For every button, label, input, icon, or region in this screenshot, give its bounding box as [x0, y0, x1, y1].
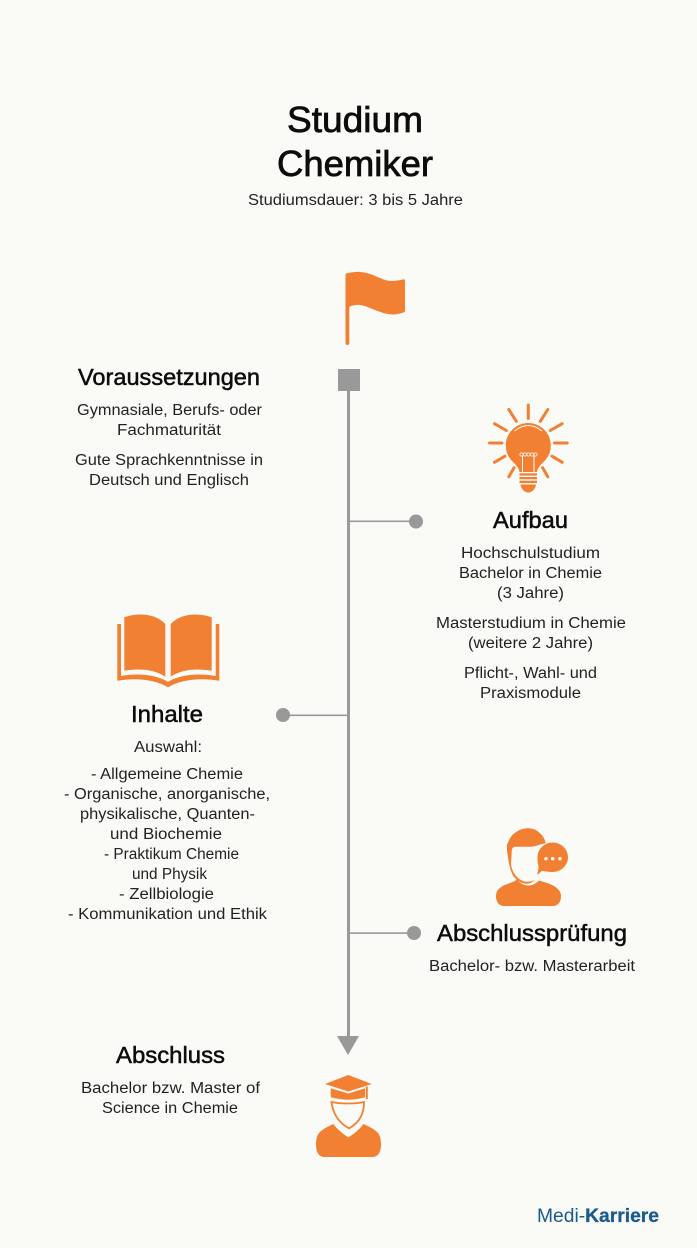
heading: Voraussetzungen: Voraussetzungen [78, 364, 260, 390]
title: Studium [287, 99, 423, 140]
panel: Abschluss [81, 1042, 261, 1117]
text: Inhalte list: und Biochemie [110, 826, 222, 843]
text: Aufbau details: Pflicht-, Wahl- und [464, 665, 597, 682]
text: Voraussetzungen details: Fachmaturität [117, 422, 222, 439]
panel: Aufbau [436, 507, 626, 702]
icon: flag [346, 272, 405, 345]
timeline vertical line [347, 390, 350, 1038]
text: Inhalte list: und Physik [132, 866, 207, 883]
panel: Inhalte [64, 701, 270, 923]
text: Inhalte list: Auswahl: [134, 739, 202, 756]
panel: Voraussetzungen [75, 364, 263, 489]
heading: Abschluss: Abschluss [116, 1042, 225, 1068]
speech bubble [537, 842, 568, 874]
text: Aufbau details: Hochschulstudium [461, 545, 600, 562]
icon: person with speech bubble [496, 828, 568, 906]
text: Inhalte list [64, 739, 270, 923]
text: Aufbau details: Praxismodule [480, 685, 581, 702]
title [277, 99, 433, 184]
text: Voraussetzungen details: Deutsch und Englisch [89, 472, 249, 489]
branch: Abschlussprüfung [350, 926, 421, 940]
text: Aufbau details: (weitere 2 Jahre) [468, 635, 593, 652]
text: Abschlussprüfung details: Bachelor- bzw. Masterarbeit [429, 958, 636, 975]
text: Voraussetzungen details: Gymnasiale, Berufs- oder [77, 402, 262, 419]
text: Abschluss details: Science in Chemie [102, 1100, 238, 1117]
text: Inhalte list: - Kommunikation und Ethik [68, 906, 267, 923]
text: Abschluss details: Bachelor bzw. Master of [81, 1080, 261, 1097]
heading: Inhalte: Inhalte [131, 701, 203, 727]
text: Aufbau details [436, 545, 626, 702]
timeline start square [338, 369, 360, 391]
icon: graduate [316, 1075, 381, 1157]
person [496, 828, 561, 906]
text: Aufbau details: Masterstudium in Chemie [436, 615, 626, 632]
text: Voraussetzungen details [75, 402, 263, 489]
logo: Medi-Karriere: Medi-Karriere [537, 1206, 659, 1227]
text: Voraussetzungen details: Gute Sprachkenntnisse in [75, 452, 263, 469]
text: Inhalte list: physikalische, Quanten- [80, 806, 255, 823]
arrow head [337, 1036, 359, 1055]
heading: Aufbau: Aufbau [493, 507, 568, 533]
timeline: axis with branches [276, 369, 423, 1055]
text: Inhalte list: - Organische, anorganische, [64, 786, 270, 803]
icon: open book [117, 615, 219, 687]
panel: Abschlussprüfung [429, 920, 636, 975]
text: Aufbau details: (3 Jahre) [497, 585, 564, 602]
subtitle: duration: Studiumsdauer: 3 bis 5 Jahre [248, 192, 463, 209]
branch: Aufbau [350, 514, 423, 528]
text: Abschluss details [81, 1080, 261, 1117]
text: Inhalte list: - Zellbiologie [119, 886, 214, 903]
text: Aufbau details: Bachelor in Chemie [459, 565, 602, 582]
branch: Inhalte [276, 708, 347, 722]
icon: light bulb [490, 405, 567, 492]
heading: Abschlussprüfung: Abschlussprüfung [437, 920, 627, 946]
text: Inhalte list: - Praktikum Chemie [104, 846, 239, 863]
title block [248, 99, 463, 209]
title: Chemiker [277, 143, 433, 184]
text: Inhalte list: - Allgemeine Chemie [91, 766, 243, 783]
